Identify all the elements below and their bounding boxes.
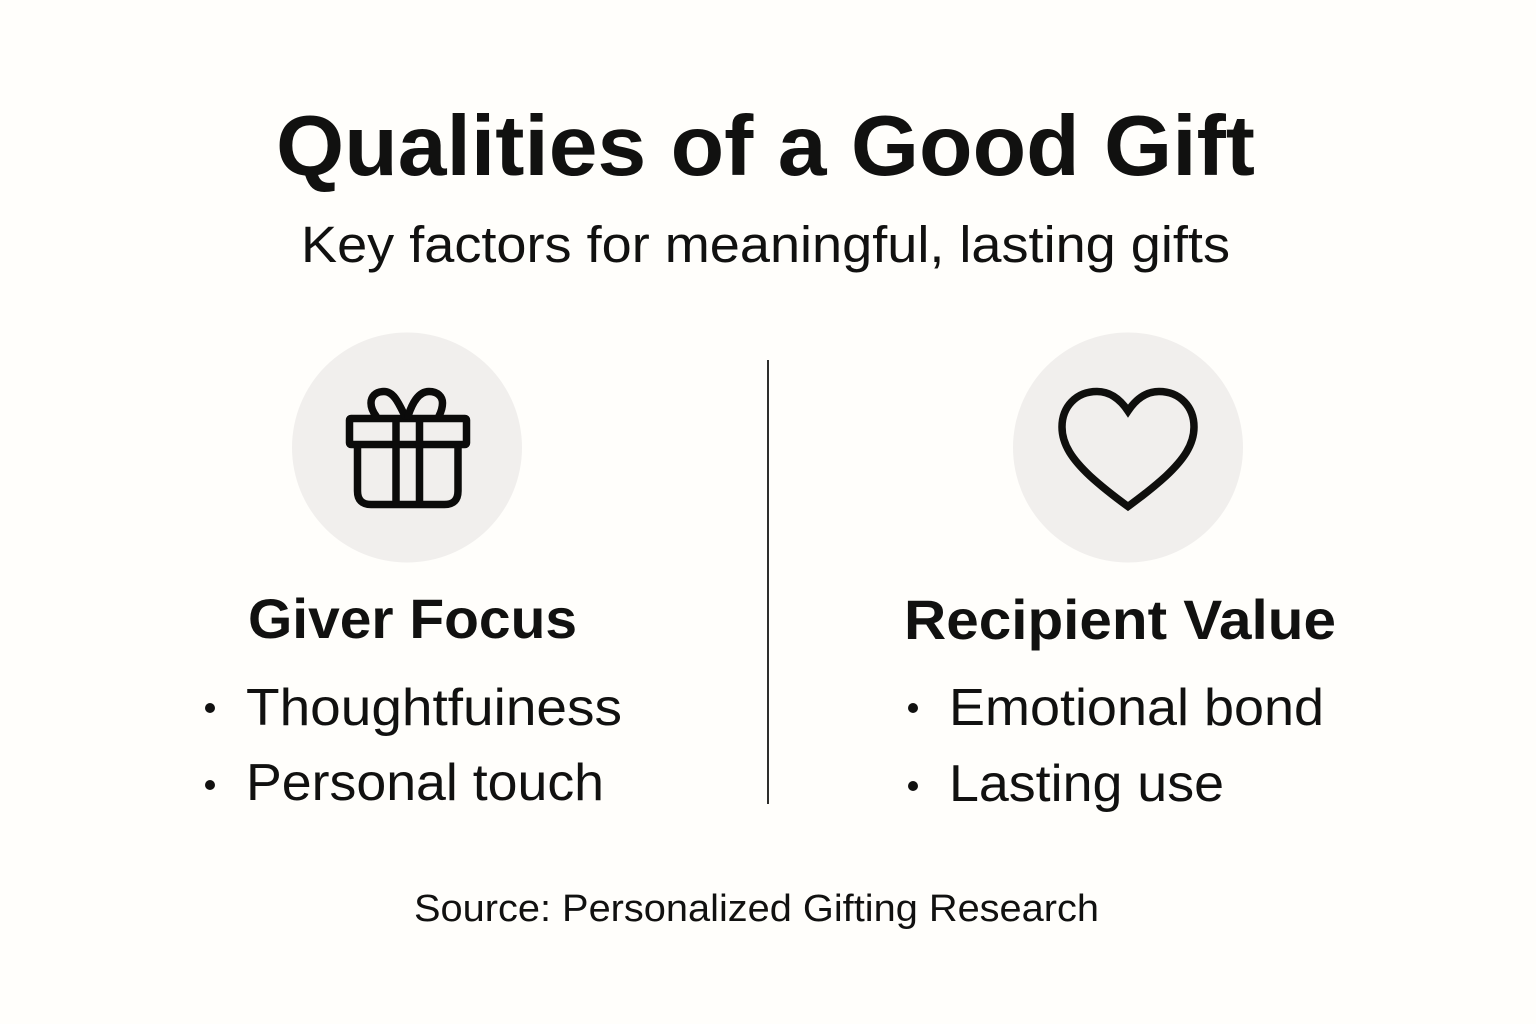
heading: recipient value: Recipient Value xyxy=(904,588,1336,651)
source note: Source: Personalized Gifting Research xyxy=(414,888,1099,930)
panel: recipient value xyxy=(904,332,1336,813)
list: giver focus items: Thoughtfuiness xyxy=(246,679,622,737)
list: recipient value items xyxy=(908,679,1324,813)
subtitle: Key factors for meaningful, lasting gifts xyxy=(301,216,1230,273)
icon: heart in circle xyxy=(1013,332,1243,562)
list: giver focus items: Personal touch xyxy=(246,754,604,812)
panel: giver focus xyxy=(205,332,622,812)
heading: giver focus: Giver Focus xyxy=(248,587,577,650)
list: giver focus items xyxy=(205,679,622,812)
icon: gift in circle xyxy=(292,332,522,562)
center divider xyxy=(767,360,769,804)
list: recipient value items: Emotional bond xyxy=(949,679,1324,737)
title: Qualities of a Good Gift xyxy=(276,99,1255,194)
list: recipient value items: Lasting use xyxy=(949,755,1224,813)
